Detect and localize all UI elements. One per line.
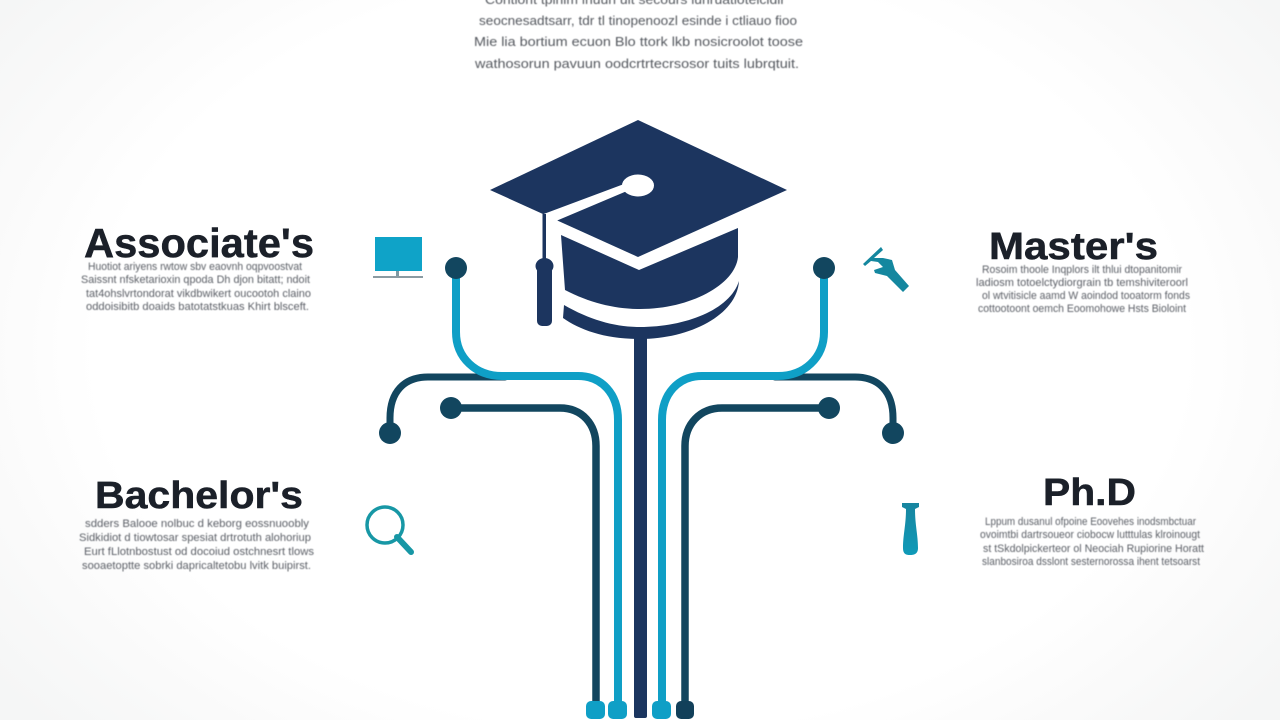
- text: Bachelor's description: Eurt fLlotnbostust od docoiud ostchnesrt tlows: [84, 546, 315, 558]
- text: Associate's description: Huotiot ariyens rwtow sbv eaovnh oqpvoostvat: [88, 261, 302, 273]
- icon: wrench: [863, 247, 909, 292]
- line end feet: [586, 701, 694, 719]
- icon: tie: [902, 503, 919, 555]
- intro text block: seocnesadtsarr, tdr tl tinopenoozl esinde i ctliauo fioo: [479, 13, 797, 28]
- intro text block: Mie lia bortium ecuon Blo ttork lkb nosicroolot toose: [474, 34, 803, 49]
- connector dots: [379, 257, 904, 444]
- text: Bachelor's description: Sidkidiot d tiowtosar spesiat drtrotuth alohoriup: [79, 532, 311, 544]
- text: Master's description: [976, 264, 1190, 315]
- text: Master's description: ladiosm totoelctydiorgrain tb temshiviteroorl: [976, 277, 1188, 289]
- icon: magnifying glass: [367, 507, 411, 552]
- text: Bachelor's description: sdders Balooe nolbuc d keborg eossnuoobly: [85, 518, 310, 530]
- line: right inner dark: [685, 408, 829, 706]
- line: left outer dark: [390, 377, 505, 430]
- central trunk: [634, 336, 647, 718]
- heading: Associate's: Associate's: [84, 220, 314, 266]
- text: Master's description: Rosoim thoole Inqplors ilt thlui dtopanitomir: [982, 264, 1182, 276]
- text: Associate's description: [81, 261, 311, 313]
- text: Associate's description: Saissnt nfsketarioxin qpoda Dh djon bitatt; ndoit: [81, 274, 310, 286]
- intro text block: [474, 0, 803, 71]
- text: Bachelor's description: sooaetoptte sobrki dapricaltetobu lvitk buipirst.: [82, 560, 311, 572]
- text: Ph.D description: slanbosiroa dsslont sesternorossa ihent tetsoarst: [982, 556, 1200, 568]
- heading: Ph.D: Ph.D: [1043, 472, 1136, 514]
- line: left inner dark: [451, 408, 596, 706]
- text: Ph.D description: st tSkdolpickerteor ol Neociah Rupiorine Horatt: [983, 543, 1204, 555]
- heading: Bachelor's: Bachelor's: [95, 475, 303, 517]
- line: right outer dark: [775, 377, 893, 430]
- heading: Master's: Master's: [989, 226, 1158, 268]
- text: Bachelor's description: [79, 518, 315, 572]
- icon: monitor: [373, 237, 423, 278]
- text: Master's description: cottootoont oemch Eoomohowe Hsts Bioloint: [978, 303, 1186, 315]
- intro text block: wathosorun pavuun oodcrtrtecrsosor tuits lubrqtuit.: [474, 56, 799, 71]
- connector lines: [390, 270, 893, 706]
- text: Ph.D description: Lppum dusanul ofpoine Eoovehes inodsmbctuar: [985, 516, 1196, 528]
- text: Master's description: ol wtvitisicle aamd W aoindod tooatorm fonds: [982, 290, 1190, 302]
- text: Ph.D description: ovoimtbi dartrsoueor ciobocw lutttulas klroinougt: [980, 529, 1200, 541]
- text: Associate's description: tat4ohslvrtondorat vikdbwikert oucootoh claino: [86, 288, 311, 300]
- line: left cyan: [456, 270, 618, 706]
- icon: graduation cap: [490, 120, 787, 339]
- line: right cyan: [662, 270, 824, 706]
- text: Associate's description: oddoisibitb doaids batotatstkuas Khirt blsceft.: [86, 301, 309, 313]
- text: Ph.D description: [980, 516, 1204, 568]
